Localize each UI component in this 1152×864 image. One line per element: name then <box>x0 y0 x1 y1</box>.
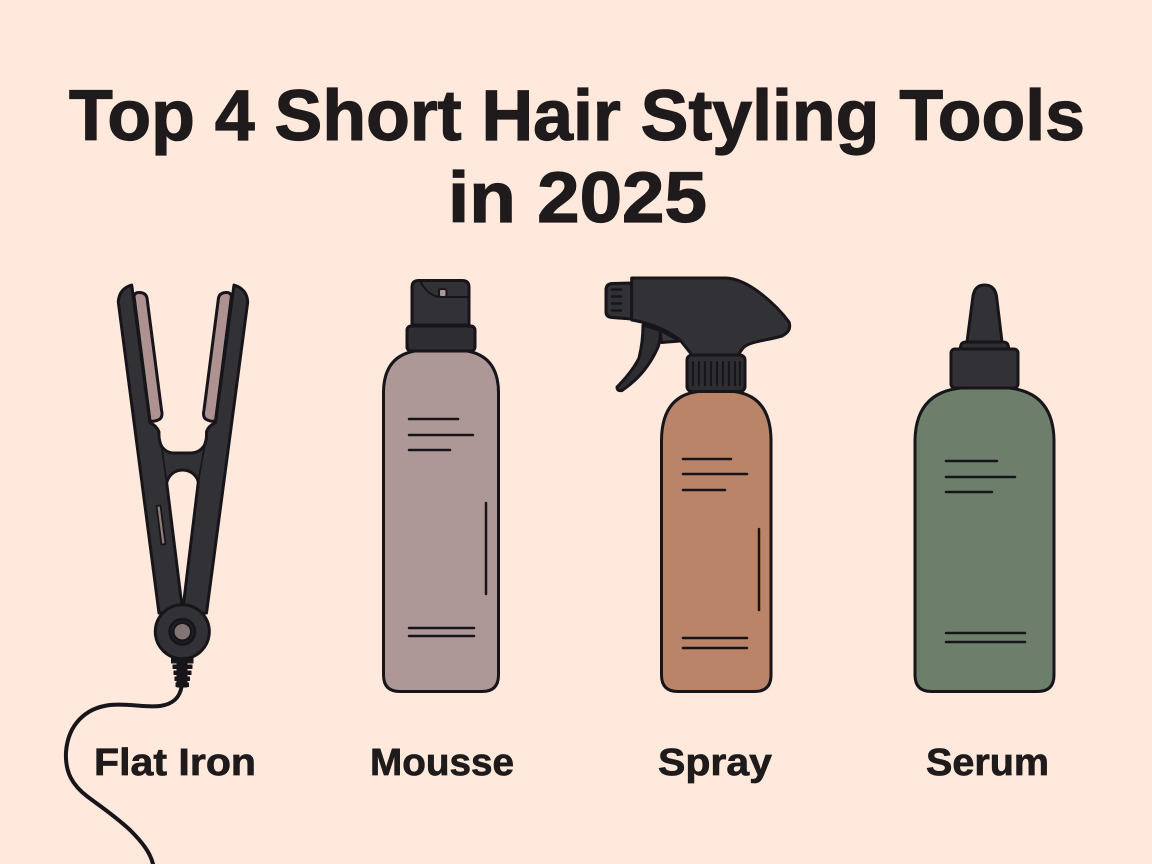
label: Flat Iron: Flat Iron <box>94 742 256 784</box>
serum cap <box>951 349 1018 388</box>
icon: serum bottle <box>915 285 1054 692</box>
iron center opening <box>167 470 198 604</box>
serum dropper tip <box>967 285 1002 342</box>
serum label lines <box>946 461 1025 642</box>
power cord <box>66 686 182 864</box>
label: Serum: Serum <box>926 742 1049 784</box>
mousse collar <box>407 326 475 351</box>
mousse bottle body <box>384 350 498 692</box>
collar ridges <box>693 362 740 385</box>
right heating plate <box>204 292 232 421</box>
title <box>69 77 1085 238</box>
spray trigger <box>617 325 660 391</box>
icon: flat iron <box>66 285 248 864</box>
label: Spray: Spray <box>658 742 772 784</box>
spray label lines <box>683 459 759 648</box>
icon: spray bottle <box>606 278 790 692</box>
title: in 2025 <box>448 159 707 238</box>
label: Mousse: Mousse <box>370 742 514 784</box>
iron arm seams <box>162 446 204 483</box>
title: Top 4 Short Hair Styling Tools <box>69 77 1085 156</box>
serum flange <box>960 342 1009 349</box>
spray collar <box>687 355 745 392</box>
strain relief <box>172 657 193 687</box>
iron indicator <box>156 506 166 544</box>
mousse nozzle <box>439 289 446 297</box>
mousse actuator <box>412 280 469 325</box>
spray nozzle <box>606 283 632 319</box>
icon: mousse bottle <box>384 280 498 692</box>
trigger brace <box>660 330 680 342</box>
iron body <box>118 285 248 613</box>
spray bottle body <box>662 391 771 692</box>
mousse label lines <box>409 419 486 636</box>
nozzle ridges <box>612 290 621 310</box>
spray head <box>632 278 790 355</box>
iron pivot <box>155 605 209 659</box>
serum bottle body <box>915 388 1054 692</box>
left heating plate <box>134 292 162 421</box>
mousse actuator detail <box>420 281 469 297</box>
